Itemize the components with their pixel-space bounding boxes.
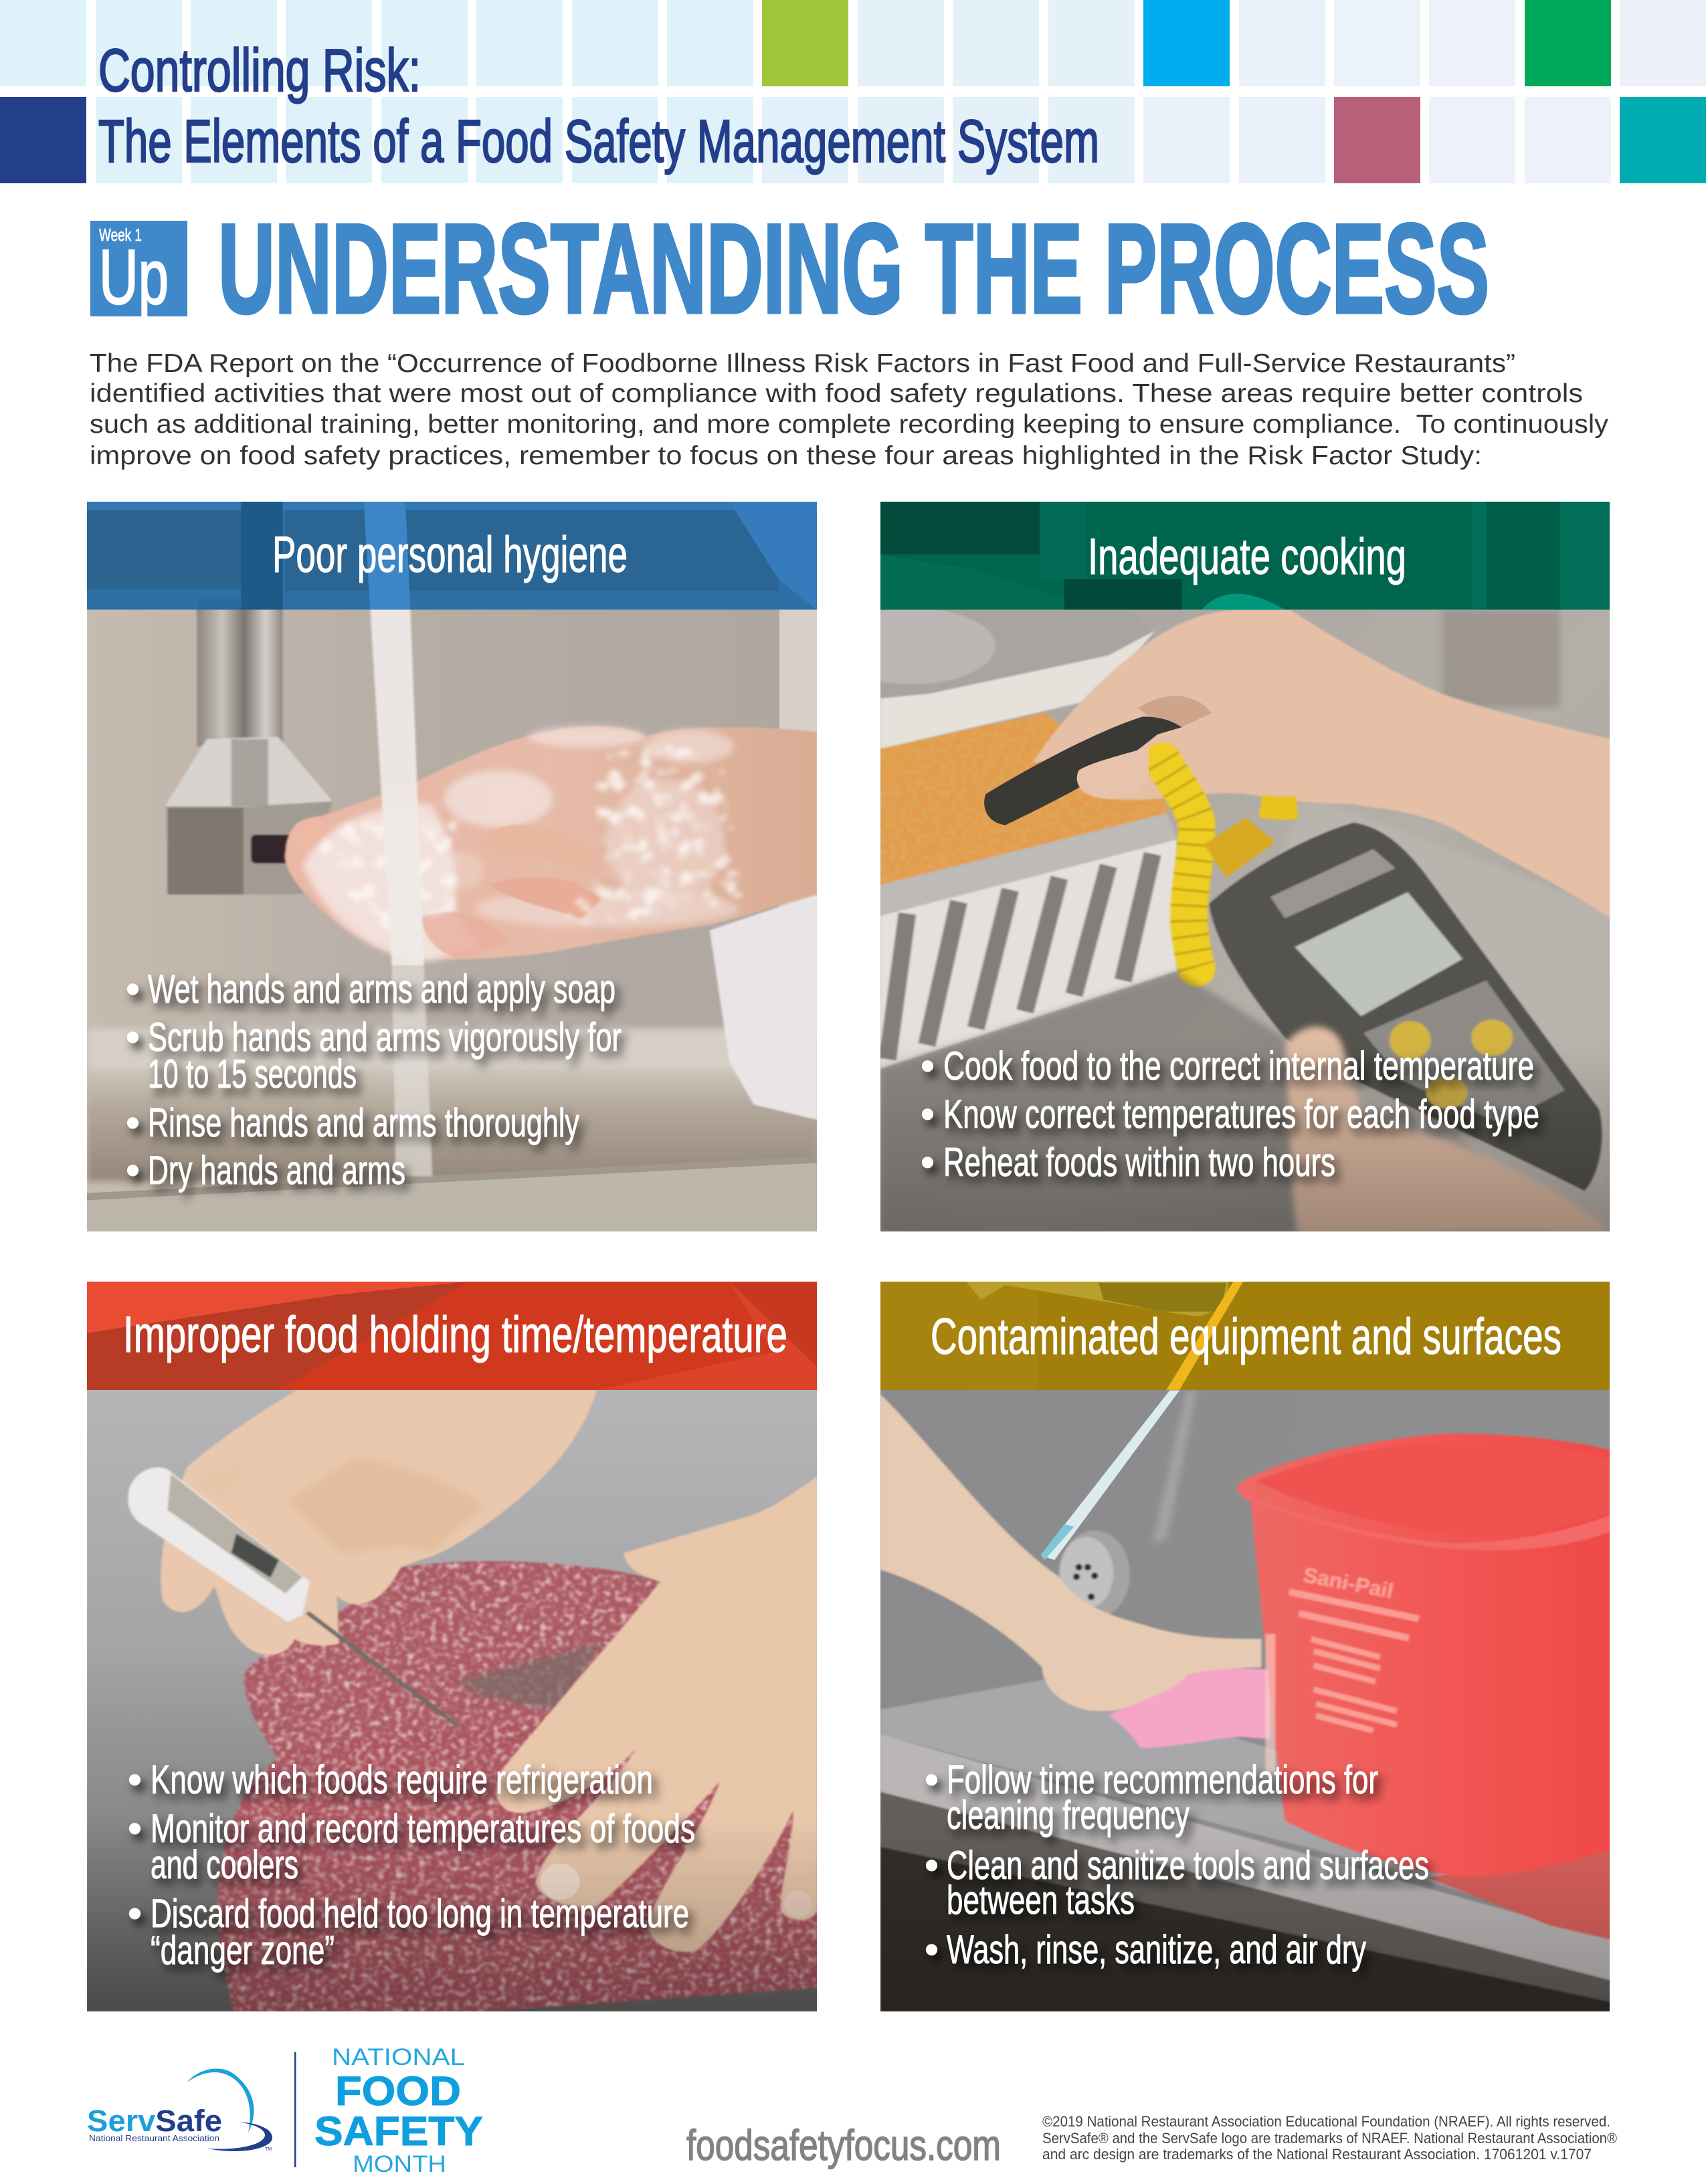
bullet list: Follow time recommendations for (947, 1757, 1378, 1802)
series title (98, 37, 1099, 175)
bullet list: • (128, 1891, 142, 1936)
series title: The Elements of a Food Safety Management System (98, 108, 1099, 175)
bullet list: cleaning frequency (947, 1793, 1190, 1838)
copyright text (1042, 2113, 1617, 2163)
header band (87, 502, 817, 609)
bullet list: • (128, 1806, 142, 1851)
logo: ServSafe (87, 2069, 272, 2152)
intro paragraph: improve on food safety practices, remember to focus on these four areas highlighted in the Risk Factor Study: (90, 441, 1482, 470)
intro paragraph: such as additional training, better monitoring, and more complete recording keeping to ensure compliance. To continuously (90, 410, 1609, 439)
panel: inadequate cooking (829, 502, 1611, 1233)
right hand (496, 1476, 818, 1952)
bullet list: • (921, 1044, 935, 1088)
hands (284, 726, 818, 961)
counter (880, 1680, 1611, 2013)
ground beef rolls (217, 1561, 818, 2013)
bullet list: • (126, 1148, 140, 1193)
bullet list: • (128, 1757, 142, 1802)
bullet list: between tasks (947, 1878, 1135, 1922)
bullet list: • (925, 1927, 939, 1972)
bullet list: Dry hands and arms (148, 1148, 405, 1193)
bullet list: Clean and sanitize tools and surfaces (947, 1843, 1429, 1888)
soap foam (302, 726, 739, 961)
bullet list (128, 1757, 695, 1973)
photo: handwashing at sink (87, 589, 817, 1231)
week badge: Week 1 (99, 225, 142, 245)
heading: Poor personal hygiene (272, 526, 628, 583)
series title: Controlling Risk: (98, 37, 421, 104)
bullet list (921, 1044, 1539, 1185)
intro paragraph: The FDA Report on the “Occurrence of Foodborne Illness Risk Factors in Fast Food and Full-Service Restaurants” (90, 349, 1515, 378)
faucet (165, 608, 333, 894)
logo: National Food Safety Month (314, 2044, 483, 2177)
bullet list: “danger zone” (151, 1928, 335, 1973)
bullet list: and coolers (151, 1842, 298, 1887)
bullet list: Wet hands and arms and apply soap (148, 967, 615, 1011)
website url: foodsafetyfocus.com (686, 2121, 1001, 2169)
probe handle (984, 716, 1182, 825)
bullet list: • (925, 1843, 939, 1888)
photo: probe thermometer in rice tray (829, 502, 1611, 1233)
water stream (369, 610, 425, 967)
thermometer (128, 1464, 458, 1726)
logo: National Food Safety Month: SAFETY (314, 2108, 483, 2154)
copyright text: ServSafe® and the ServSafe logo are trademarks of NRAEF. National Restaurant Association® (1042, 2130, 1617, 2147)
drain (1059, 1530, 1130, 1618)
spray stream (1040, 1391, 1179, 1560)
copyright text: ©2019 National Restaurant Association Educational Foundation (NRAEF). All rights reserved. (1042, 2113, 1610, 2130)
yellow coiled cord (1162, 761, 1297, 969)
icon: ServSafe arcs (187, 2069, 272, 2151)
bullet list: Know which foods require refrigeration (151, 1757, 653, 1802)
header band (880, 1282, 1611, 1390)
red sani-pail (1236, 1433, 1611, 1876)
bullet list: Discard food held too long in temperature (151, 1891, 689, 1936)
sleeve (710, 894, 818, 1120)
photo: thermometer probing ground beef (87, 1282, 818, 2013)
bullet list: • (126, 967, 140, 1011)
photo: wiping steel counter beside red pail (880, 1282, 1611, 2013)
bullet list: Wash, rinse, sanitize, and air dry (947, 1927, 1366, 1972)
week badge: Up (99, 233, 169, 320)
logo: ServSafe: ServSafe (87, 2104, 222, 2138)
bullet list: Reheat foods within two hours (943, 1140, 1335, 1185)
copyright text: and arc design are trademarks of the National Restaurant Association. 17061201 v.1707 (1042, 2146, 1592, 2163)
arm (880, 1394, 1262, 1711)
header band (87, 1282, 817, 1390)
logo: National Food Safety Month: FOOD (335, 2068, 461, 2114)
intro paragraph: identified activities that were most out of compliance with food safety regulations. These areas require better controls (90, 379, 1583, 408)
bullet list: 10 to 15 seconds (148, 1052, 357, 1096)
heading: Improper food holding time/temperature (123, 1306, 787, 1363)
bullet list: • (126, 1015, 140, 1060)
bullet list (126, 967, 622, 1193)
logo: National Food Safety Month: NATIONAL (332, 2044, 465, 2070)
upper hand (161, 1390, 597, 1655)
header band (880, 502, 1611, 609)
bullet list: • (925, 1757, 939, 1802)
panel: contaminated equipment and surfaces (880, 1282, 1611, 2013)
logo: ServSafe: TM (265, 2147, 272, 2152)
bullet list: • (921, 1092, 935, 1136)
bullet list: Rinse hands and arms thoroughly (148, 1100, 579, 1145)
panel: poor personal hygiene (87, 502, 819, 1233)
bullet list: Monitor and record temperatures of foods (151, 1806, 695, 1851)
heading: Inadequate cooking (1088, 528, 1406, 585)
panel: improper food holding time/temperature (87, 1282, 818, 2013)
meter (1209, 823, 1602, 1191)
hand (1032, 609, 1611, 918)
logo: National Food Safety Month: MONTH (353, 2151, 446, 2177)
header tile grid (0, 0, 1706, 183)
foil tray (829, 608, 1177, 1069)
bullet list: • (921, 1140, 935, 1185)
bullet list: • (126, 1100, 140, 1145)
red sani-pail: Sani-Pail (1301, 1563, 1396, 1603)
pink cloth (1109, 1668, 1270, 1748)
bullet list: Scrub hands and arms vigorously for (148, 1015, 622, 1060)
divider line (294, 2052, 296, 2167)
lower hand (1285, 1027, 1611, 1233)
intro paragraph (90, 349, 1609, 470)
bullet list (925, 1757, 1429, 1972)
logo: ServSafe: National Restaurant Association (89, 2134, 219, 2143)
